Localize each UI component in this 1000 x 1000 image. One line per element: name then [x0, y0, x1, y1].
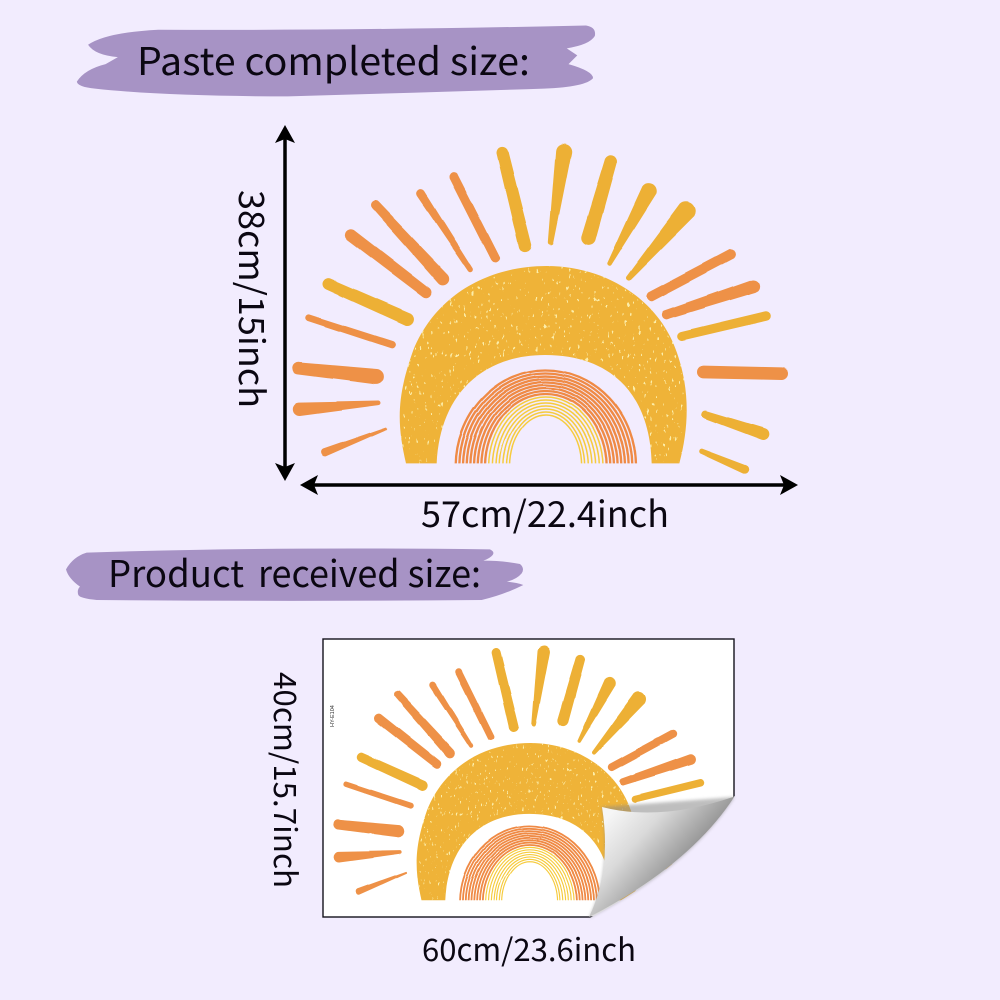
- heading: paste completed size: [77, 26, 595, 96]
- peel shadow: [589, 797, 734, 918]
- dimension arrow: height: [275, 125, 295, 481]
- label: 60cm/23.6inch: 60cm/23.6inch: [422, 925, 636, 970]
- heading: product received size: received size:: [258, 544, 481, 598]
- heading: product received size: [66, 544, 523, 601]
- sheet background: [323, 639, 734, 917]
- dimension arrow: width: [300, 475, 798, 495]
- sun illustration: sticker: [333, 645, 718, 908]
- sun illustration: completed size: [292, 144, 788, 474]
- heading: paste completed size: Paste completed size:: [137, 31, 530, 86]
- label: 40cm/15.7inch: 40cm/15.7inch: [265, 672, 310, 888]
- label: 57cm/22.4inch: 57cm/22.4inch: [421, 486, 669, 538]
- sticker sheet: [323, 639, 736, 919]
- peeled corner: [589, 796, 734, 917]
- heading: product received size: Product: [108, 544, 244, 598]
- label: 38cm/15inch: 38cm/15inch: [228, 190, 279, 408]
- peeled corner cutout: [588, 796, 736, 919]
- product code: HY-E104: [330, 705, 336, 727]
